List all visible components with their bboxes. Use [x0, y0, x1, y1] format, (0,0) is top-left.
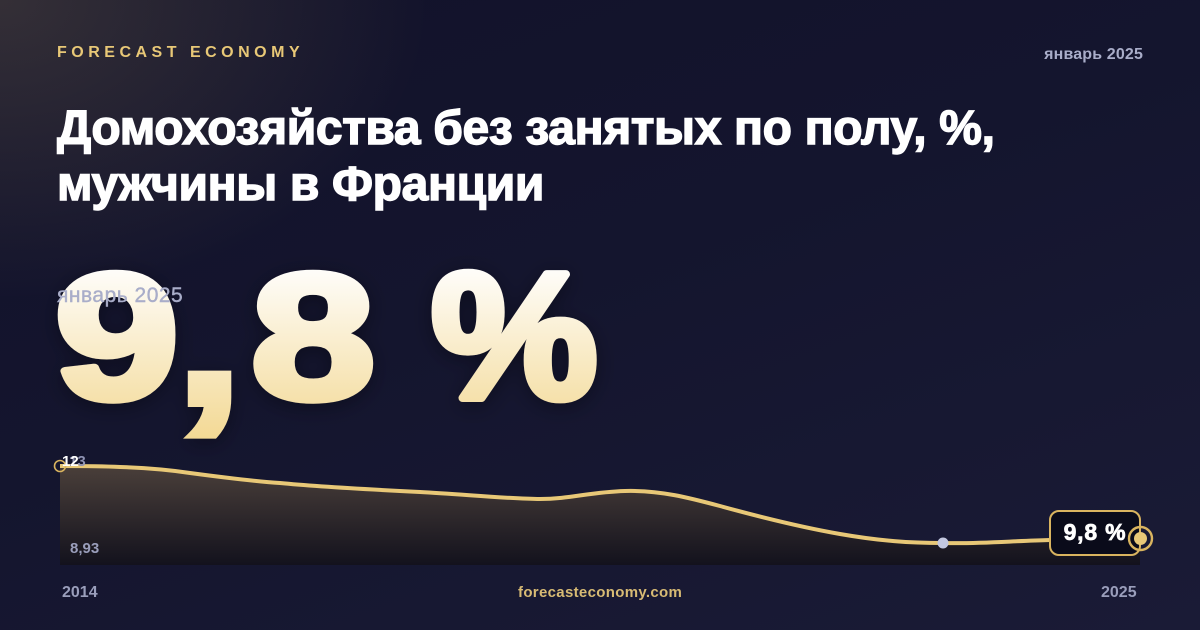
big value: , — [174, 219, 245, 447]
footer site: forecasteconomy.com — [518, 584, 682, 601]
axis max label shadow: 13 — [69, 453, 86, 470]
end callout — [1050, 511, 1140, 555]
end marker — [1129, 527, 1152, 550]
data line — [60, 466, 1140, 543]
axis max label: 12 — [62, 453, 79, 470]
date top right: январь 2025 — [1044, 46, 1143, 63]
big value: 9 — [55, 237, 179, 436]
big value: 8 — [251, 237, 375, 436]
axis min label: 8,93 — [70, 540, 99, 557]
title — [56, 102, 995, 211]
big value: % — [431, 235, 597, 436]
date over value: январь 2025 — [57, 284, 183, 307]
title: мужчины в Франции — [57, 158, 544, 211]
min marker — [938, 538, 948, 548]
start year: 2014 — [62, 584, 98, 601]
brand label: FORECAST ECONOMY — [57, 44, 304, 61]
area fill — [60, 466, 1140, 565]
end year: 2025 — [1101, 584, 1137, 601]
end callout: 9,8 % — [1064, 519, 1126, 545]
start marker — [54, 460, 66, 472]
title: Домохозяйства без занятых по полу, %, — [57, 102, 995, 155]
